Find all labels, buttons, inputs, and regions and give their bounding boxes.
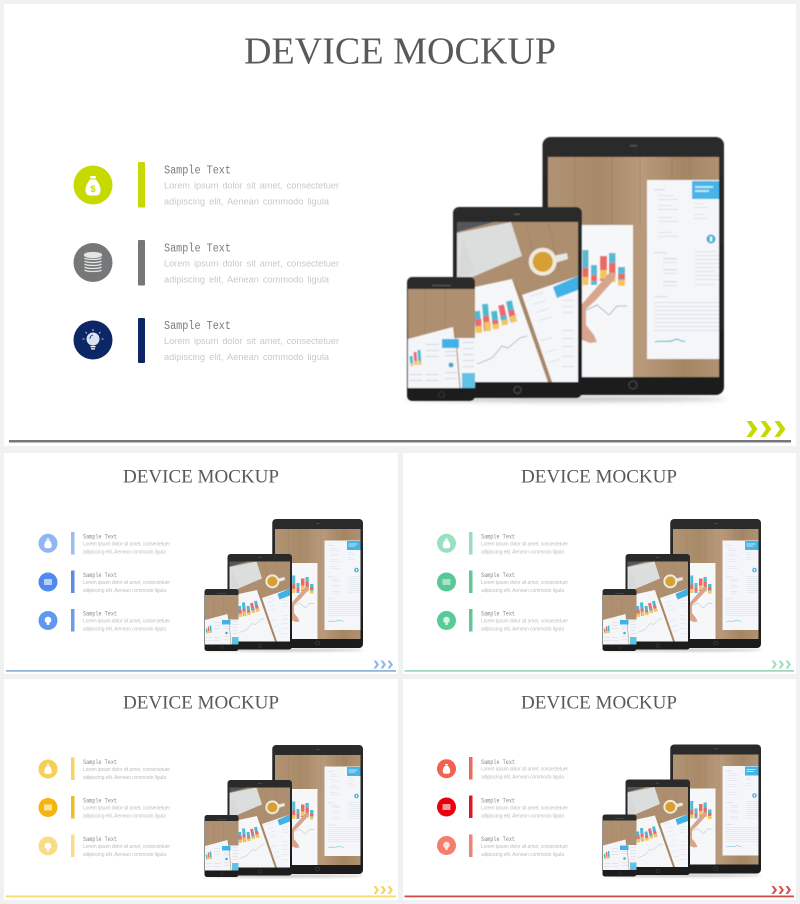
item 2 icon [437,798,456,816]
item 3 bar [469,834,472,857]
item 3: text: Sample Text [164,320,231,333]
panel: yellow slide [4,679,398,900]
item 3 text: Sample Text [83,610,117,618]
item 3 icon [38,836,58,856]
item 1: text: adipiscing elit, Aenean commodo ligula [164,196,330,206]
item 2: text [164,242,339,284]
item 1: text: Sample Text [164,164,231,178]
item 2: coins icon [74,243,112,282]
arrows [772,886,791,894]
panel: red slide [403,679,796,900]
item 1 text [83,534,170,555]
item 1 text: adipiscing elit, Aenean commodo ligula [481,549,564,555]
title: DEVICE MOCKUP [521,692,677,714]
item 1 icon [38,760,58,778]
item 2 text: Sample Text [83,572,117,579]
item 3 text: Sample Text [83,836,117,843]
item 2 icon [38,798,58,817]
item 2 icon [437,572,456,592]
item 1: money bag icon: $ [90,184,96,194]
item 3 bar [71,834,74,857]
item 2 text: Sample Text [83,798,117,804]
item 3 text: adipiscing elit, Aenean commodo ligula [481,852,564,858]
bottom rule [9,440,791,442]
item 3: text: Lorem ipsum dolor sit amet, consectetuer [164,336,339,346]
item 1 icon [437,534,456,553]
item 1 text: Sample Text [83,759,117,766]
item 3: accent bar [138,318,145,363]
device mockup [204,519,364,652]
item 3 text: Lorem ipsum dolor sit amet, consectetuer [83,844,170,850]
item 1 bar [71,532,74,554]
item 3 text: adipiscing elit, Aenean commodo ligula [481,626,564,632]
item 3 text [481,836,568,858]
item 1: money bag icon [74,166,112,204]
item 3: text [164,320,339,362]
item 3 text: Lorem ipsum dolor sit amet, consectetuer [481,844,568,850]
item 2 text: Lorem ipsum dolor sit amet, consectetuer [83,580,170,586]
item 3 text: Lorem ipsum dolor sit amet, consectetuer [481,618,568,624]
device mockup [204,745,364,878]
title: DEVICE MOCKUP [123,466,279,488]
item 2 text [83,798,170,820]
item 3 text: Sample Text [481,610,515,618]
panel: main slide (lime) [4,4,796,446]
arrows [374,660,393,668]
item 1 text: adipiscing elit, Aenean commodo ligula [481,775,564,781]
title: DEVICE MOCKUP [123,692,279,714]
item 2 text: adipiscing elit, Aenean commodo ligula [83,588,166,594]
item 2: text: Sample Text [164,242,231,256]
item 1 text: Lorem ipsum dolor sit amet, consectetuer [481,767,568,773]
item 3 icon [38,611,58,630]
item 3: light bulb icon [74,320,112,360]
item 3 text: adipiscing elit, Aenean commodo ligula [83,852,166,858]
arrows [772,660,791,668]
item 2 bar [469,796,472,818]
item 1 icon [38,534,58,553]
item 1 text [481,759,568,781]
device mockup [602,744,762,877]
item 3 text [83,610,170,632]
title: DEVICE MOCKUP [244,30,556,72]
item 2 bar [71,796,74,818]
item 1 text: adipiscing elit, Aenean commodo ligula [83,549,166,555]
item 1 bar [71,758,74,780]
device mockup: tablet, small tablet and phone [406,137,726,402]
item 2 text: Sample Text [481,572,515,579]
item 3 text: adipiscing elit, Aenean commodo ligula [83,626,166,632]
item 1: accent bar [138,162,145,208]
bottom rule [404,670,794,672]
item 3 text [481,610,568,632]
item 2: accent bar [138,240,145,286]
item 2 text: Lorem ipsum dolor sit amet, consectetuer [481,580,568,586]
item 1 text [481,534,568,555]
item 1 bar [469,532,472,554]
item 1 text: Sample Text [481,534,515,540]
item 1 text: Lorem ipsum dolor sit amet, consectetuer [83,767,170,773]
item 3 text: Lorem ipsum dolor sit amet, consectetuer [83,618,170,624]
item 2: text: adipiscing elit, Aenean commodo ligula [164,274,330,284]
item 2 text: adipiscing elit, Aenean commodo ligula [481,813,564,819]
item 1 text: Lorem ipsum dolor sit amet, consectetuer [83,541,170,547]
item 2 text: Lorem ipsum dolor sit amet, consectetuer [83,806,170,812]
device mockup [602,519,762,652]
item 1 text: Sample Text [481,759,515,766]
item 3: text: adipiscing elit, Aenean commodo ligula [164,352,330,362]
arrows [374,886,393,894]
panel: blue slide [4,453,398,674]
item 1 text [83,759,170,781]
bottom rule [6,670,396,672]
item 2: text: Lorem ipsum dolor sit amet, consectetuer [164,258,339,268]
title: DEVICE MOCKUP [521,466,677,488]
item 3 icon [437,836,456,855]
item 3 text: Sample Text [481,836,515,843]
item 2 icon [38,572,58,592]
item 2 text: adipiscing elit, Aenean commodo ligula [83,814,166,820]
item 2 text [481,572,568,594]
item 1 text: adipiscing elit, Aenean commodo ligula [83,775,166,781]
arrows [746,421,786,437]
item 2 text [83,572,170,594]
item 2 bar [469,570,472,593]
item 1: text: Lorem ipsum dolor sit amet, consectetuer [164,180,339,190]
item 1 text: Sample Text [83,534,117,540]
item 2 text [481,798,568,819]
item 3 text [83,836,170,858]
item 1: text [164,164,339,206]
item 1 text: Lorem ipsum dolor sit amet, consectetuer [481,541,568,547]
item 2 text: Lorem ipsum dolor sit amet, consectetuer [481,805,568,811]
item 3 icon [437,611,456,630]
item 2 bar [71,570,74,593]
panel: green slide [403,453,796,674]
item 3 bar [469,609,472,632]
item 3 bar [71,609,74,632]
bottom rule [404,896,794,897]
item 2 text: Sample Text [481,798,515,804]
item 1 icon [437,759,456,778]
item 1 bar [469,757,472,780]
item 2 text: adipiscing elit, Aenean commodo ligula [481,588,564,594]
bottom rule [6,896,396,897]
